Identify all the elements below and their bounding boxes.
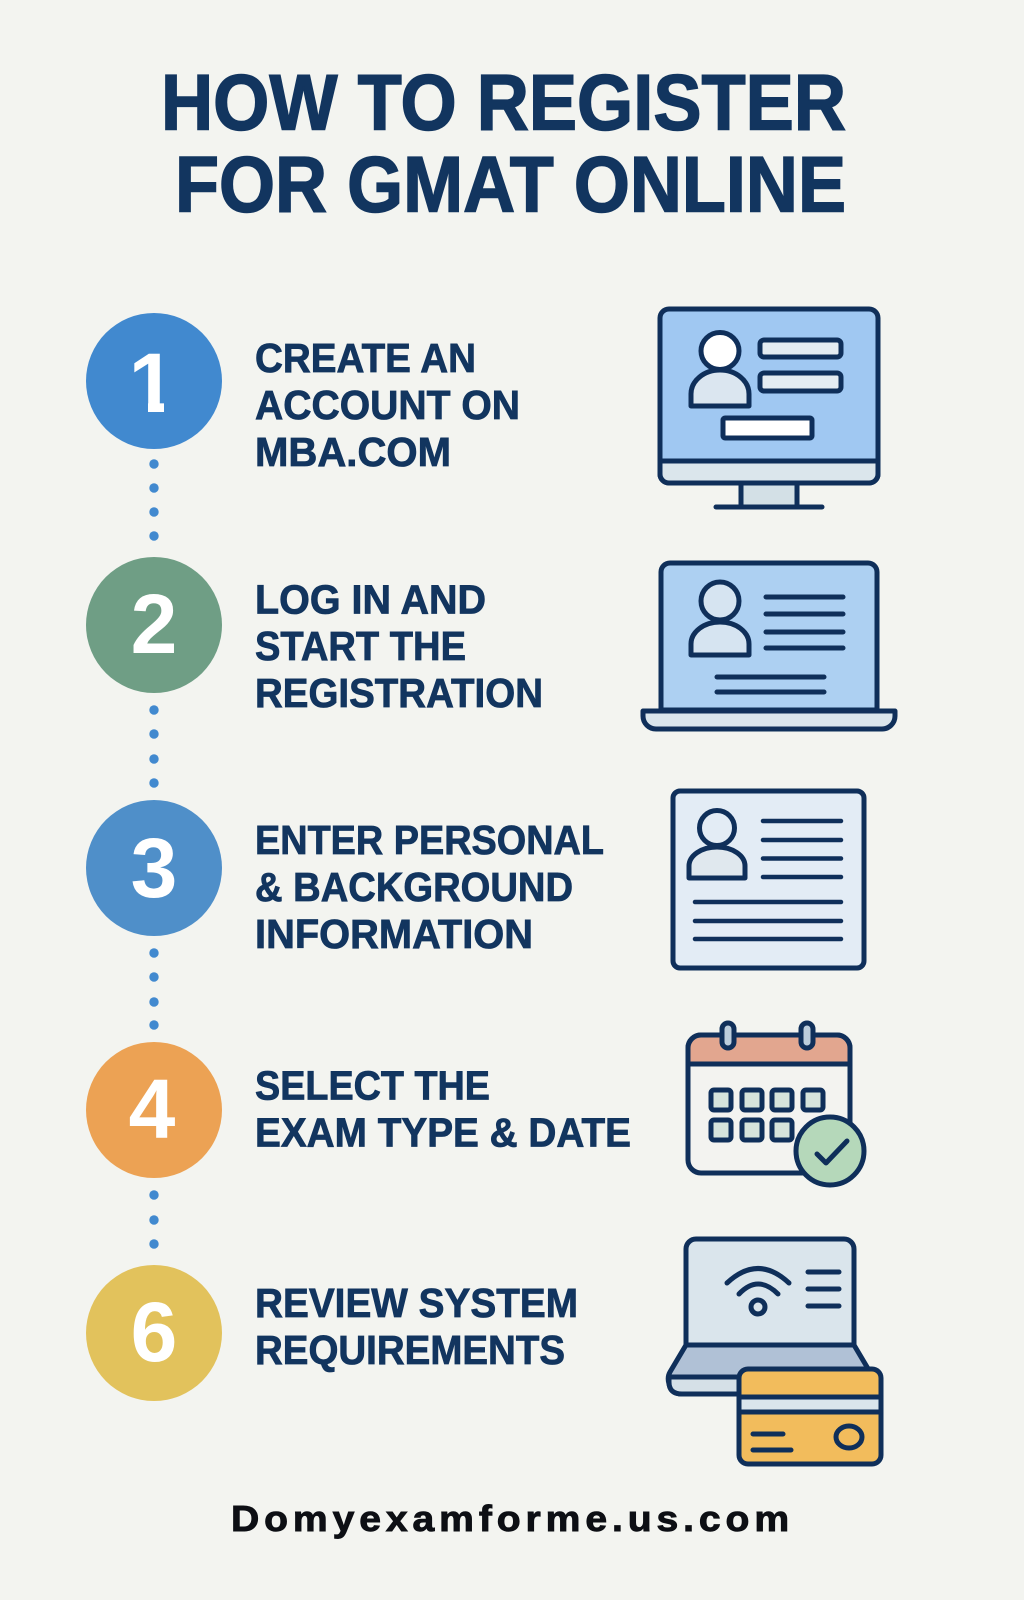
icon: desktop monitor with profile form (660, 309, 878, 507)
connector dots 3-4 (149, 948, 159, 1030)
title: FOR GMAT ONLINE (175, 140, 846, 228)
step 1 text: CREATE AN (255, 335, 476, 381)
connector dots 2-3 (149, 705, 159, 788)
step 3 badge: 3 (131, 821, 177, 915)
title: HOW TO REGISTER (161, 58, 846, 146)
step 2 text (255, 576, 543, 716)
icon: laptop with profile (643, 563, 895, 729)
step 3 text: & BACKGROUND (255, 864, 573, 910)
step 2 text: LOG IN AND (255, 576, 486, 622)
step 3 text (255, 817, 604, 957)
step 2 text: START THE (255, 623, 466, 669)
step 4 text: EXAM TYPE & DATE (255, 1110, 631, 1156)
step 1 badge (86, 313, 222, 449)
title (161, 58, 846, 228)
icon: calendar with check (688, 1023, 864, 1185)
step 6 badge (86, 1265, 222, 1401)
step 6 badge: 6 (131, 1285, 177, 1379)
step 4 badge: 4 (129, 1062, 176, 1156)
step 3 badge (86, 800, 222, 936)
step 1 text: MBA.COM (255, 429, 451, 475)
step 1 text: ACCOUNT ON (255, 382, 520, 428)
step 3 text: INFORMATION (255, 911, 533, 957)
icon: laptop with wifi and credit card (668, 1239, 881, 1464)
connector dots 4-6 (149, 1190, 159, 1249)
step 4 badge (86, 1042, 222, 1178)
step 1 badge: 1 (129, 336, 175, 430)
step 4 text (255, 1062, 631, 1156)
icon: profile document (673, 791, 864, 968)
step 2 text: REGISTRATION (255, 670, 543, 716)
step 3 text: ENTER PERSONAL (255, 817, 604, 863)
footer website: Domyexamforme.us.com (231, 1498, 794, 1539)
connector dots 1-2 (149, 459, 159, 541)
step 2 badge (86, 557, 222, 693)
step 1 text (255, 335, 520, 475)
step 2 badge: 2 (131, 577, 177, 671)
step 4 text: SELECT THE (255, 1062, 490, 1108)
step 6 text: REVIEW SYSTEM (255, 1280, 578, 1326)
step 6 text: REQUIREMENTS (255, 1327, 565, 1373)
step 6 text (255, 1280, 578, 1373)
